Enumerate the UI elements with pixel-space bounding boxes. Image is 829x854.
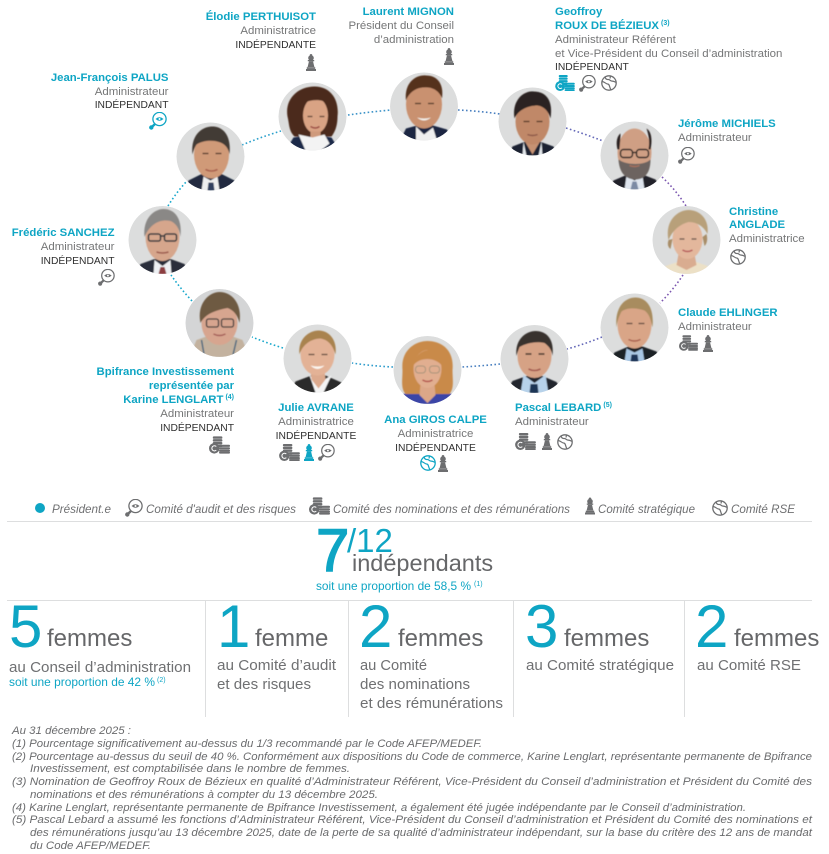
director: Frédéric Sanchez [12, 206, 196, 286]
name and role: Jean-François PALUS [51, 72, 169, 84]
portrait [600, 122, 668, 190]
stat: women on strategy committee [525, 593, 674, 674]
director: Élodie Perthuisot [206, 10, 346, 150]
name and role [729, 206, 805, 245]
director: Christine Anglade [652, 206, 805, 274]
stat: women on nominations committee: des nominations [360, 677, 470, 693]
name and role [515, 402, 612, 428]
name and role: INDÉPENDANTE [395, 441, 476, 454]
name and role: Administrateur [160, 408, 234, 420]
name and role [678, 118, 776, 144]
icon: strategy pawn [444, 48, 454, 65]
name and role: Administrateur Référent [555, 34, 677, 46]
icons: nominations, strategy, RSE [515, 433, 572, 450]
name and role [348, 6, 454, 46]
ring of dotted connectors [168, 110, 686, 367]
legend: RSE: Comité RSE [731, 502, 796, 516]
name and role: Pascal LEBARD [515, 402, 601, 414]
name and role [51, 72, 169, 111]
legend [35, 497, 796, 517]
headline: independent directors [316, 517, 493, 593]
footnotes: Au 31 décembre 2025 : [11, 725, 131, 737]
stat: women on strategy committee: 3 [525, 593, 558, 660]
name and role [206, 10, 316, 51]
portrait [284, 324, 352, 392]
name and role: Administratrice [398, 428, 473, 440]
footnotes: des rémunérations jusqu’au 13 décembre 2025, date de la perte de sa qualité d’administrateur indépendant, sur la base du critère des 12 ans de mandat [30, 827, 813, 839]
icon: nominations committee [209, 436, 230, 454]
portrait [498, 88, 566, 156]
stat: women on nominations committee: 2 [359, 593, 392, 660]
name and role: (4) [225, 394, 234, 401]
director: Geoffroy Roux de Bézieux [498, 6, 782, 156]
name and role: ROUX DE BÉZIEUX [555, 20, 659, 32]
name and role: INDÉPENDANT [41, 254, 115, 267]
footnotes: (5) Pascal Lebard a assumé les fonctions d’Administrateur Référent, Vice-Président du Conseil d’administration et Président du Comité des nominations et [12, 814, 813, 826]
legend: stratégique [585, 498, 695, 516]
stat: women on the board: soit une proportion de 42 % [9, 675, 155, 689]
portrait [600, 294, 668, 362]
director: Julie Avrane [276, 324, 356, 461]
headline: independent directors: 7 [316, 517, 349, 584]
director: Laurent Mignon [348, 6, 458, 140]
name and role: ANGLADE [729, 219, 786, 231]
headline: independent directors: indépendants [352, 550, 493, 576]
name and role: Christine [729, 206, 778, 218]
name and role: INDÉPENDANT [555, 60, 630, 73]
name and role: INDÉPENDANTE [235, 38, 316, 51]
stat: women on nominations committee: femmes [398, 625, 483, 652]
footnotes: nominations et des rémunérations à compter du 13 décembre 2025. [30, 789, 378, 801]
name and role: Administrateur [41, 241, 115, 253]
portrait [390, 72, 458, 140]
name and role: Administrateur [678, 321, 752, 333]
footnotes: (2) Pourcentage au-dessus du seuil de 40 %. Conformément aux dispositions du Code de commerce, Karine Lenglart, représentante permanente de Bpifrance [12, 751, 812, 763]
name and role: Geoffroy [555, 6, 603, 18]
icons: nominations, audit, RSE [555, 75, 616, 92]
name and role [12, 227, 115, 267]
stat: women on audit committee [217, 593, 336, 693]
stat: women on the board: (2) [157, 677, 166, 684]
headline: independent directors: (1) [474, 581, 483, 588]
portrait [278, 82, 346, 150]
name and role: Administratrice [278, 416, 354, 428]
stat: women on nominations committee [359, 593, 503, 712]
name and role: (5) [603, 402, 612, 409]
footnotes: (4) Karine Lenglart, représentante permanente de Bpifrance Investissement, a également été jugée indépendante par le Conseil d’administration. [12, 802, 746, 814]
name and role [555, 6, 782, 73]
name and role: Karine LENGLART [123, 394, 223, 406]
stat: women on the board [9, 593, 191, 689]
stat: women on the board: femmes [47, 625, 132, 652]
name and role: Julie AVRANE [278, 402, 354, 414]
director: Jérôme Michiels [600, 118, 776, 190]
name and role: Administrateur [678, 132, 752, 144]
name and role: et Vice-Président du Conseil d’administration [555, 48, 782, 60]
director: Ana Giros Calpe [384, 336, 487, 472]
icon: audit committee [678, 147, 694, 164]
name and role [384, 414, 487, 454]
name and role: Frédéric SANCHEZ [12, 227, 115, 239]
icon: audit committee [98, 269, 114, 286]
name and role: Claude EHLINGER [678, 307, 778, 319]
stat: women on nominations committee: et des rémunérations [360, 696, 503, 712]
stat: women on the board: au Conseil d’administration [9, 660, 191, 676]
legend: nominations [309, 497, 570, 516]
icon: audit committee [149, 112, 166, 130]
director: Jean-François Palus [51, 72, 244, 190]
icons: nominations, strategy, audit [279, 444, 334, 461]
name and role: d’administration [374, 34, 454, 46]
portrait [394, 336, 462, 404]
name and role: Président du Conseil [348, 20, 454, 32]
stat: women on audit committee: et des risques [217, 677, 311, 693]
footnotes: Investissement, est comptabilisée dans le nombre de femmes. [30, 763, 350, 775]
legend: nominations: Comité des nominations et des rémunérations [333, 502, 570, 516]
icons: nominations, strategy [679, 335, 713, 352]
portrait [186, 289, 254, 357]
footnotes: (1) Pourcentage significativement au-dessus du 1/3 recommandé par le Code AFEP/MEDEF. [12, 738, 482, 750]
stat: women on audit committee: femme [255, 625, 328, 652]
legend: audit: Comité d'audit et des risques [146, 502, 296, 516]
name and role: Administrateur [515, 416, 589, 428]
name and role: Élodie PERTHUISOT [206, 10, 316, 23]
name and role: (3) [661, 20, 670, 27]
portrait [500, 325, 568, 393]
icon: strategy pawn [306, 54, 316, 71]
headline: independent directors: soit une proportion de 58,5 % [316, 579, 471, 593]
stat: women on audit committee: au Comité d’audit [217, 658, 336, 674]
name and role: INDÉPENDANTE [276, 429, 356, 442]
name and role [678, 307, 778, 333]
stat: women on the board: 5 [9, 593, 42, 660]
stat: women on RSE committee: 2 [695, 593, 728, 660]
legend: président: Président.e [52, 502, 111, 516]
name and role: INDÉPENDANT [95, 98, 169, 111]
director: Bpifrance Investissement / Karine Lenglart [97, 289, 254, 454]
director: Pascal Lebard [500, 325, 612, 450]
name and role: Jérôme MICHIELS [678, 118, 776, 130]
stat: women on RSE committee: au Comité RSE [697, 658, 801, 674]
stat: women on RSE committee [695, 593, 819, 674]
portrait [652, 206, 720, 274]
director: Claude Ehlinger [600, 294, 778, 362]
footnotes: du Code AFEP/MEDEF. [30, 840, 151, 852]
stat: women on nominations committee: au Comité [360, 658, 427, 674]
name and role: Bpifrance Investissement [97, 366, 234, 378]
name and role: Administratrice [729, 233, 805, 245]
stat: women on RSE committee: femmes [734, 625, 819, 652]
portrait [176, 122, 244, 190]
portrait [128, 206, 196, 274]
icon: RSE committee [731, 250, 745, 264]
name and role: Ana GIROS CALPE [384, 414, 487, 426]
name and role: Administratrice [240, 25, 316, 37]
legend: audit [125, 499, 296, 517]
name and role: Laurent MIGNON [363, 6, 454, 18]
icons: RSE, strategy [421, 455, 448, 472]
name and role: INDÉPENDANT [160, 421, 235, 434]
stat: women on strategy committee: au Comité stratégique [526, 658, 674, 674]
footnotes: (3) Nomination de Geoffroy Roux de Bézieux en qualité d’Administrateur Référent, Vice-Président du Conseil d’administration et Président du Comité des [12, 776, 813, 788]
legend: stratégique: Comité stratégique [598, 502, 695, 516]
name and role [276, 402, 356, 442]
name and role: Administrateur [95, 86, 169, 98]
stat: women on audit committee: 1 [217, 593, 250, 660]
headline: independent directors: /12 [347, 522, 393, 559]
stat: women on strategy committee: femmes [564, 625, 649, 652]
name and role: représentée par [149, 380, 235, 392]
footnotes [11, 725, 813, 852]
name and role [97, 366, 235, 434]
